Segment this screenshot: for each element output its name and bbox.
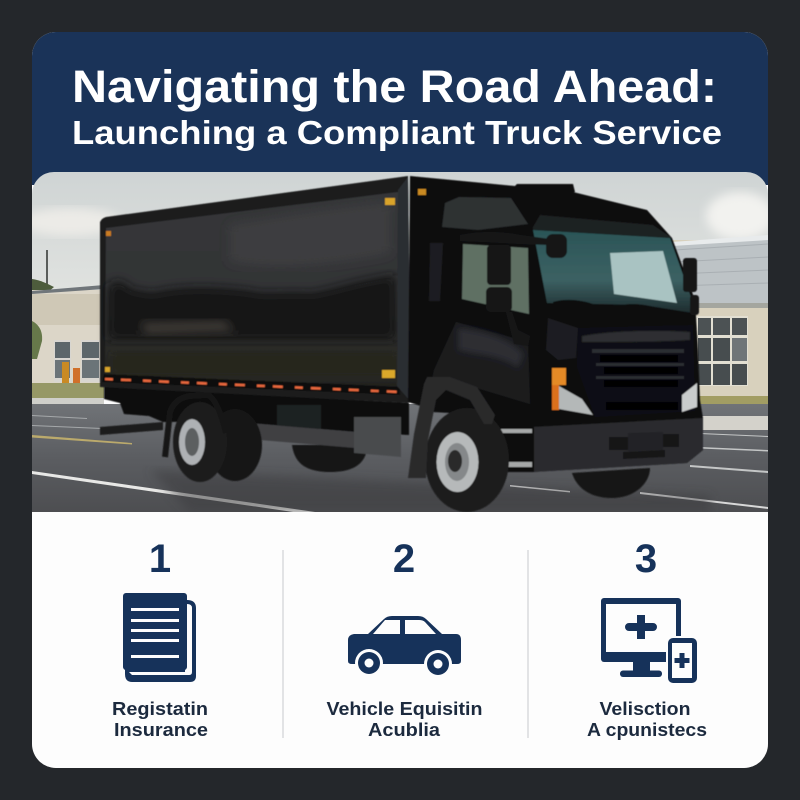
marker light: [418, 189, 426, 195]
lower cab step well: [490, 410, 534, 472]
step number 2: 2: [393, 537, 415, 581]
step plates: [497, 429, 532, 467]
title: [72, 61, 722, 151]
bumper: [532, 418, 703, 472]
label 2: Vehicle Equisitin: [326, 699, 482, 719]
roof fairing: [442, 197, 528, 230]
label 3: A cpunistecs: [587, 720, 707, 740]
label 3: Velisction: [600, 699, 690, 719]
label 1: [112, 699, 208, 740]
step 3: compliance technology: [587, 537, 707, 740]
truck: [100, 176, 703, 512]
step 1: registration and insurance: [112, 537, 208, 740]
icon: document stack: [123, 593, 196, 682]
headlights: [552, 368, 697, 415]
grille: [577, 325, 695, 417]
step number 1: 1: [149, 537, 171, 581]
divider: [282, 550, 284, 738]
chassis rail and tank: [256, 416, 402, 457]
icon: car: [348, 616, 461, 678]
title: Launching a Compliant Truck Service: [72, 114, 722, 151]
door reflections: [430, 322, 530, 404]
divider: [527, 550, 529, 738]
step number 3: 3: [635, 537, 657, 581]
front right tire: [572, 468, 650, 498]
road: [32, 404, 768, 513]
side window: [462, 244, 529, 314]
hood side panel: [546, 318, 578, 360]
icon: monitor and phone: [601, 598, 699, 685]
sky: [32, 172, 768, 290]
label 1: Registatin: [112, 699, 208, 719]
rear wheels: [165, 395, 262, 482]
label 2: Acublia: [368, 720, 441, 740]
mirrors: [460, 232, 699, 346]
middle wheels: [292, 445, 368, 472]
photo: black box truck in a parking lot: [20, 172, 774, 513]
label 2: [326, 699, 482, 740]
cargo box: [100, 176, 411, 403]
wheel arch: [408, 377, 495, 478]
label 1: Insurance: [114, 720, 208, 740]
cab body: [426, 187, 703, 472]
step 2: vehicle acquisition: [326, 537, 482, 740]
right building: [672, 235, 768, 404]
cab rear and roof deflector: [408, 176, 575, 412]
label 3: [587, 699, 707, 740]
cab vent: [429, 243, 443, 301]
panel: title banner: [32, 32, 768, 185]
chassis and tail bar: [100, 386, 409, 435]
roof visor: [533, 215, 672, 238]
windshield: [533, 230, 693, 328]
front wheel: [425, 408, 509, 512]
left building: [32, 250, 104, 405]
title: Navigating the Road Ahead:: [72, 61, 717, 112]
